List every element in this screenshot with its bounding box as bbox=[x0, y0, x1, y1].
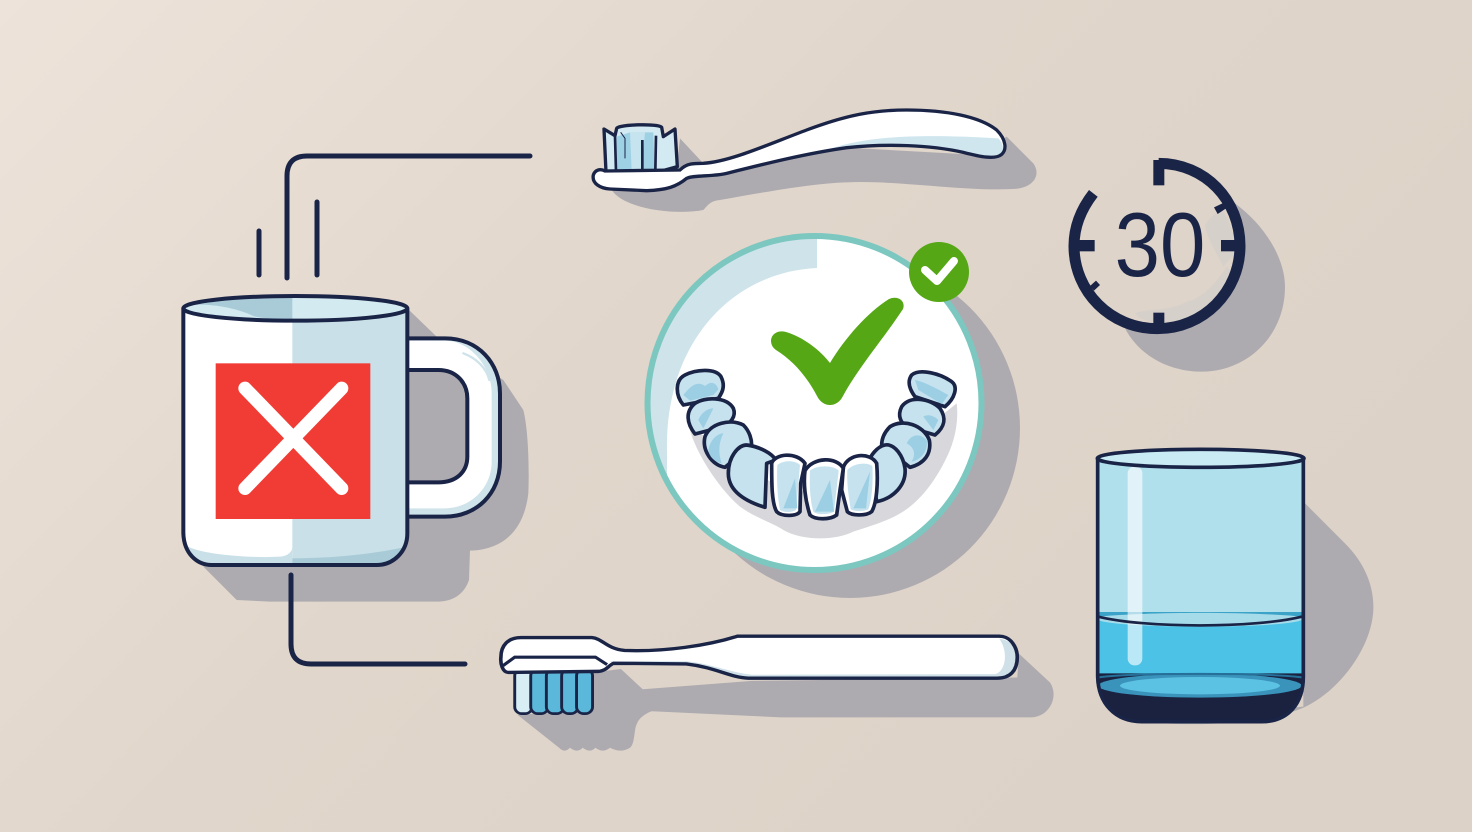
mug handle bbox=[407, 338, 500, 517]
mug rim bbox=[183, 296, 407, 321]
faint inner shadow bbox=[1135, 211, 1235, 323]
icon: teeth in white circle with check marks bbox=[640, 230, 1020, 598]
timer ring bbox=[1074, 163, 1240, 329]
glass outline bbox=[1098, 458, 1303, 722]
large green check bbox=[771, 298, 904, 405]
timer ticks bbox=[1077, 160, 1238, 326]
glass shadow bbox=[1142, 502, 1373, 724]
connector line: bottom bbox=[291, 575, 465, 664]
mug body bbox=[180, 300, 409, 570]
white disc bbox=[648, 236, 982, 570]
icon: steam lines bbox=[259, 202, 317, 275]
green badge bbox=[909, 242, 969, 302]
icon: coffee mug with red cross bbox=[180, 296, 529, 602]
toothbrush shadow bbox=[517, 654, 1054, 751]
toothbrush shadow bbox=[612, 137, 1037, 212]
light blue crescent bbox=[650, 239, 817, 474]
icon: flat toothbrush bbox=[501, 636, 1054, 751]
water line bbox=[1098, 617, 1302, 625]
icon: angled toothbrush bbox=[593, 110, 1037, 212]
icon: glass of water bbox=[1095, 449, 1373, 727]
handle bbox=[593, 110, 1005, 191]
timer number: 30 bbox=[1115, 195, 1205, 296]
connector line: top bbox=[287, 156, 530, 278]
handle and head bbox=[501, 636, 1017, 678]
glass rim bbox=[1097, 449, 1304, 467]
mug shadow bbox=[203, 308, 529, 602]
bristles bbox=[604, 125, 677, 172]
bristles bbox=[515, 669, 593, 714]
glass body and water bbox=[1100, 462, 1302, 720]
icon: 30 second timer bbox=[1074, 160, 1285, 372]
teal ring bbox=[648, 236, 982, 570]
timer shadow bbox=[1125, 203, 1285, 372]
teeth arch bbox=[677, 370, 957, 538]
circle shadow bbox=[680, 258, 1020, 598]
red cross panel bbox=[216, 363, 370, 519]
